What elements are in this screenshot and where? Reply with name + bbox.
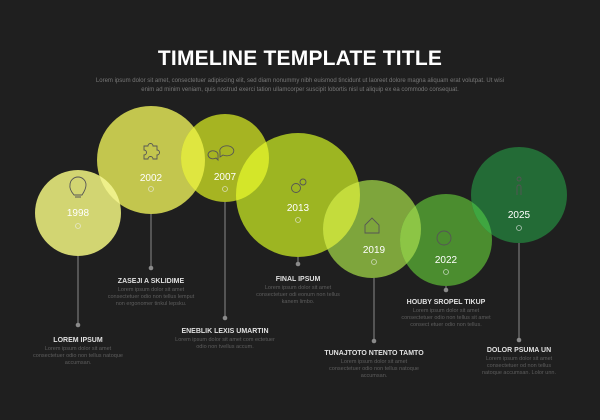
event 2013: FINAL IPSUM — [276, 276, 320, 283]
event 2019 — [324, 350, 424, 379]
subtitle: Lorem ipsum dolor sit amet, consectetuer adipiscing elit, sed diam nonummy nibh euismod tincidunt ut laoreet dolore magna aliquam erat volutpat. Ut wisi enim ad minim veniam, quis nostrud exerci tation ullamcorper suscipit lobortis nisl ut aliquip ex ea commodo consequat. — [96, 78, 504, 92]
years: 2007 — [214, 172, 237, 183]
years — [67, 172, 531, 266]
event 2025 — [482, 347, 556, 376]
timeline chart — [35, 106, 567, 344]
years: 2019 — [363, 245, 386, 256]
event 2002 — [108, 278, 194, 307]
event 2007: Lorem ipsum dolor sit amet com ectetuer odio non tvellus accum. — [175, 337, 275, 350]
event 2025: DOLOR PSUMA UN — [487, 347, 551, 354]
event 2002: ZASEJI A SKLIDIME — [118, 278, 184, 285]
event 2019: Lorem ipsum dolor sit amet consectetuer odio non tellus natoque accumsan. — [329, 359, 419, 379]
event 2007: ENEBLIK LEXIS UMARTIN — [181, 328, 269, 335]
years: 2013 — [287, 203, 310, 214]
event 1998 — [33, 337, 123, 366]
event 2022: Lorem ipsum dolor sit amet consectetuer odio non tellus sit amet consect etuer odio non tellus. — [401, 308, 491, 328]
event 1998: LOREM IPSUM — [53, 337, 103, 344]
title: TIMELINE TEMPLATE TITLE — [158, 47, 442, 70]
years: 2025 — [508, 210, 531, 221]
event 2007 — [175, 328, 275, 350]
event 1998: Lorem ipsum dolor sit amet consectetuer odio non tellus natoque accumsan. — [33, 346, 123, 366]
event 2022 — [401, 299, 491, 328]
event 2013: Lorem ipsum dolor sit amet consectetuer odi eonum non tellus kanem limbo. — [256, 285, 340, 305]
icons — [70, 144, 521, 245]
overlaps — [99, 127, 492, 264]
event 2022: HOUBY SROPEL TIKUP — [407, 299, 485, 306]
event 2019: TUNAJTOTO NTENTO TAMTO — [324, 350, 424, 357]
years: 2022 — [435, 255, 458, 266]
event 2013 — [256, 276, 340, 305]
event 2025: Lorem ipsum dolor sit amet consectetuer od non tellus natoque accumsan. Lolor unn. — [482, 356, 556, 376]
event 2002: Lorem ipsum dolor sit amet consectetuer odio non tellus lemput non ergonomer tinkul lepsku. — [108, 287, 194, 307]
years: 1998 — [67, 208, 90, 219]
circles — [35, 106, 567, 286]
years: 2002 — [140, 173, 163, 184]
markers — [76, 186, 522, 274]
